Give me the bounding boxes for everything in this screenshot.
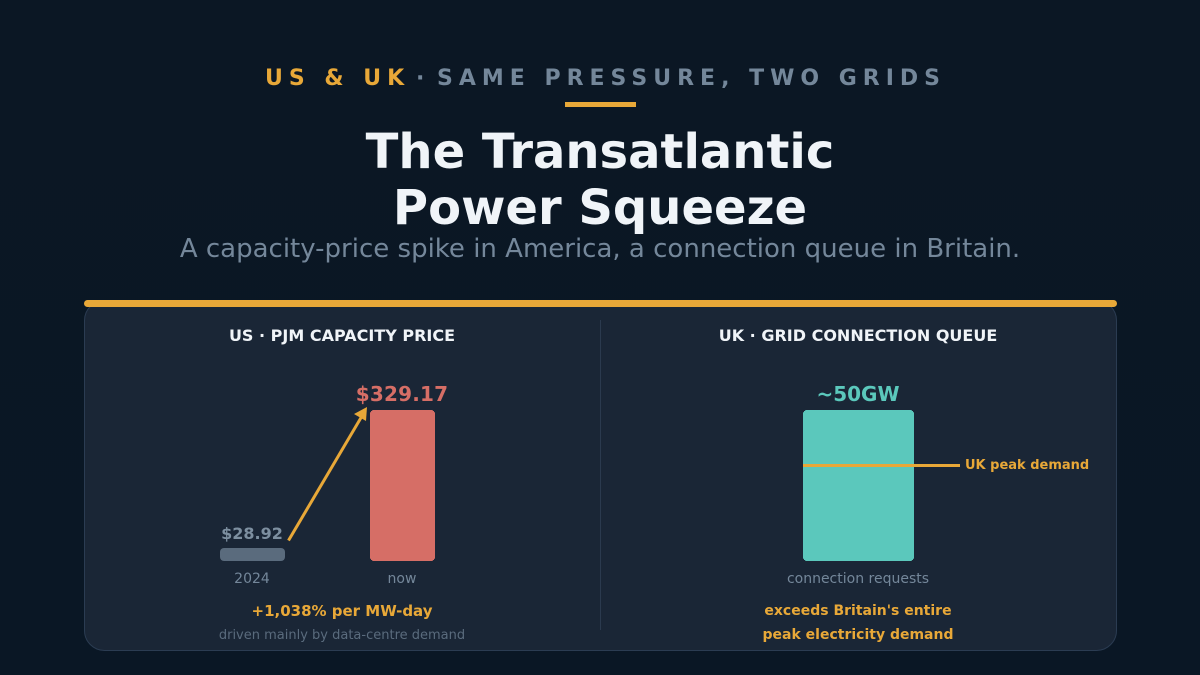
title: The Transatlantic: [366, 124, 834, 180]
panel: US PJM capacity price: [219, 326, 465, 643]
accent rule under eyebrow: [565, 102, 636, 107]
label: connection requests: connection requests: [787, 571, 929, 587]
eyebrow: US & UK, same pressure, two grids: ·: [416, 66, 430, 91]
value: 50GW: ~50GW: [816, 382, 900, 406]
bar: now: [370, 410, 435, 561]
label: 2024: 2024: [234, 571, 270, 587]
bar: 2024: [220, 548, 285, 561]
callout: exceeds peak demand: [763, 603, 953, 643]
title: Power Squeeze: [393, 180, 807, 236]
bar: connection requests: [803, 410, 914, 561]
value: 2024: $28.92: [221, 524, 283, 543]
eyebrow: US & UK, same pressure, two grids: US & UK: [265, 66, 410, 91]
value: now: $329.17: [356, 382, 448, 406]
panel: comparison card: [84, 300, 1117, 650]
accent bar on card top: [84, 300, 1117, 307]
callout: exceeds peak demand: exceeds Britain's entire: [764, 603, 952, 619]
heading: UK: UK · GRID CONNECTION QUEUE: [719, 326, 997, 345]
subtitle: A capacity-price spike in America, a connection queue in Britain.: [180, 234, 1020, 264]
label: UK peak demand: UK peak demand: [965, 458, 1089, 473]
arrow: rise from 2024 to now: [288, 407, 367, 540]
heading: US: US · PJM CAPACITY PRICE: [229, 326, 455, 345]
title: [366, 124, 834, 236]
marker: UK peak demand line: [803, 464, 960, 467]
eyebrow: US & UK, same pressure, two grids: SAME PRESSURE, TWO GRIDS: [437, 66, 946, 91]
note: demand driver: driven mainly by data-centre demand: [219, 628, 465, 643]
panel: UK grid connection queue: [719, 326, 1089, 643]
label: now: now: [388, 571, 416, 587]
callout: price increase: +1,038% per MW-day: [252, 602, 433, 620]
callout: exceeds peak demand: peak electricity demand: [763, 627, 953, 643]
